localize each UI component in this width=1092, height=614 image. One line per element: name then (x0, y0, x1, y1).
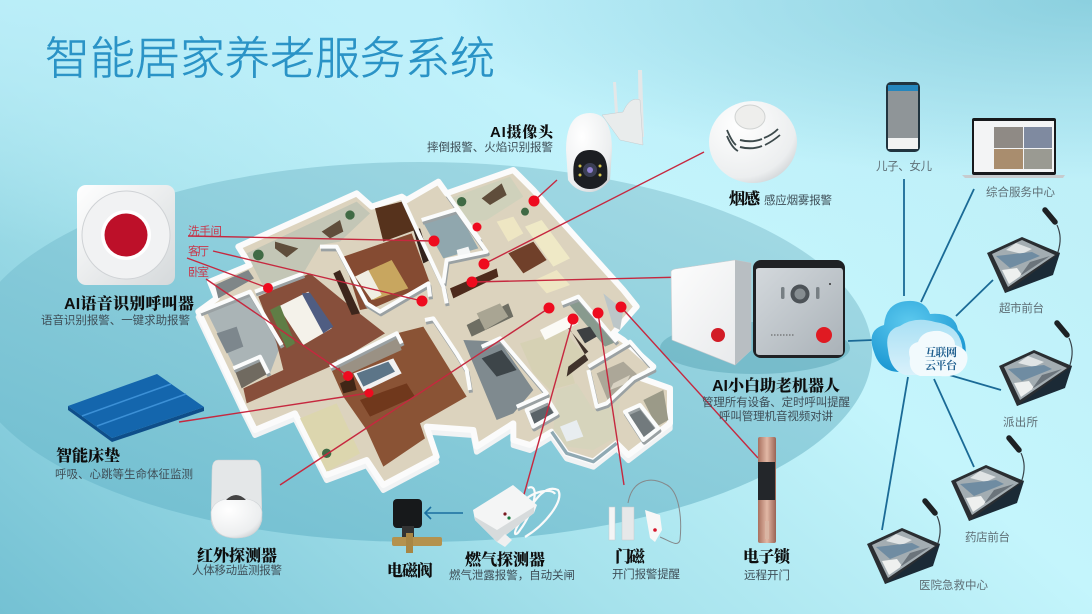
text: smart mattress (55, 446, 193, 481)
icon: smart mattress (68, 374, 204, 442)
text: infrared detector: 人体移动监测报警 (192, 563, 282, 577)
room labels: 洗手间 (188, 224, 222, 238)
text: smoke detector: 烟感 (728, 189, 762, 208)
icon: robot main unit (671, 260, 751, 365)
text: AI robot (702, 376, 850, 423)
icon: infrared detector (211, 460, 262, 538)
text: service center: 综合服务中心 (986, 185, 1056, 199)
text: police station: 派出所 (1003, 415, 1038, 429)
icon: cloud platform (872, 301, 968, 376)
text: pharmacy: 药店前台 (965, 530, 1010, 544)
icon: robot video panel (753, 260, 845, 358)
red callout lines (179, 152, 758, 498)
panel: robot base ellipse (660, 322, 850, 374)
icon: cloud platform: 互联网 (925, 344, 957, 360)
icon: AI camera (566, 70, 644, 192)
text: sons and daughters: 儿子、女儿 (876, 159, 932, 173)
text: smoke detector (728, 189, 832, 208)
floor plan (198, 170, 670, 490)
panel: teal ellipse (0, 162, 872, 542)
text: smart mattress: 呼吸、心跳等生命体征监测 (55, 467, 193, 481)
text: infrared detector: 红外探测器 (197, 546, 277, 565)
blue connection lines (848, 179, 1001, 530)
title: 智能居家养老服务系统 (45, 22, 495, 87)
panel: room floors (207, 177, 668, 472)
panel: interior walls (200, 193, 658, 440)
icon: cloud platform: 云平台 (925, 357, 958, 373)
text: door sensor: 门磁 (615, 547, 646, 566)
text: door sensor: 开门报警提醒 (612, 567, 680, 581)
text: solenoid valve: 电磁阀 (387, 561, 433, 580)
icon: electronic lock (758, 437, 776, 543)
text: infrared detector (192, 546, 282, 577)
text: AI voice caller: 语音识别报警、一键求助报警 (41, 313, 190, 327)
icon: door sensor (609, 480, 681, 543)
icon: hospital terminal (867, 501, 940, 584)
room labels (188, 224, 222, 279)
text: AI voice caller: AI语音识别呼叫器 (64, 294, 194, 313)
text: smoke detector: 感应烟雾报警 (764, 193, 832, 207)
text: door sensor (612, 547, 680, 581)
text: smart mattress: 智能床垫 (56, 446, 120, 465)
text: gas detector (449, 550, 575, 582)
text: electronic lock: 电子锁 (743, 547, 791, 566)
icon: smartphone (886, 82, 920, 152)
text: AI robot: 管理所有设备、定时呼叫提醒 (702, 395, 850, 409)
icon: smoke detector (709, 101, 797, 183)
text: AI voice caller (41, 294, 194, 327)
arrow: gas detector to valve (425, 507, 463, 519)
text: supermarket: 超市前台 (999, 301, 1044, 315)
panel: wall side faces (201, 196, 659, 443)
text: hospital: 医院急救中心 (919, 578, 988, 592)
text: gas detector: 燃气泄露报警，自动关闸 (449, 568, 575, 582)
icon: pharmacy terminal (951, 438, 1024, 521)
text: AI robot: AI小白助老机器人 (712, 376, 840, 395)
room labels: 卧室 (188, 265, 209, 279)
text: AI camera (427, 123, 555, 154)
red location dots (263, 196, 626, 398)
text: AI camera: 摔倒报警、火焰识别报警 (427, 140, 554, 154)
text: AI robot: 呼叫管理机音视频对讲 (719, 409, 834, 423)
icon: supermarket terminal (987, 210, 1060, 293)
text: gas detector: 燃气探测器 (464, 550, 545, 569)
icon: solenoid valve (392, 499, 442, 553)
text: electronic lock (743, 547, 791, 582)
icon: laptop (962, 118, 1065, 178)
icon: police terminal (999, 323, 1072, 406)
icon: furniture (217, 183, 630, 458)
text: electronic lock: 远程开门 (744, 568, 790, 582)
text: AI camera: AI摄像头 (490, 123, 555, 141)
icon: gas detector (473, 485, 559, 547)
room labels: 客厅 (188, 244, 209, 258)
icon: AI voice call button (77, 185, 175, 285)
